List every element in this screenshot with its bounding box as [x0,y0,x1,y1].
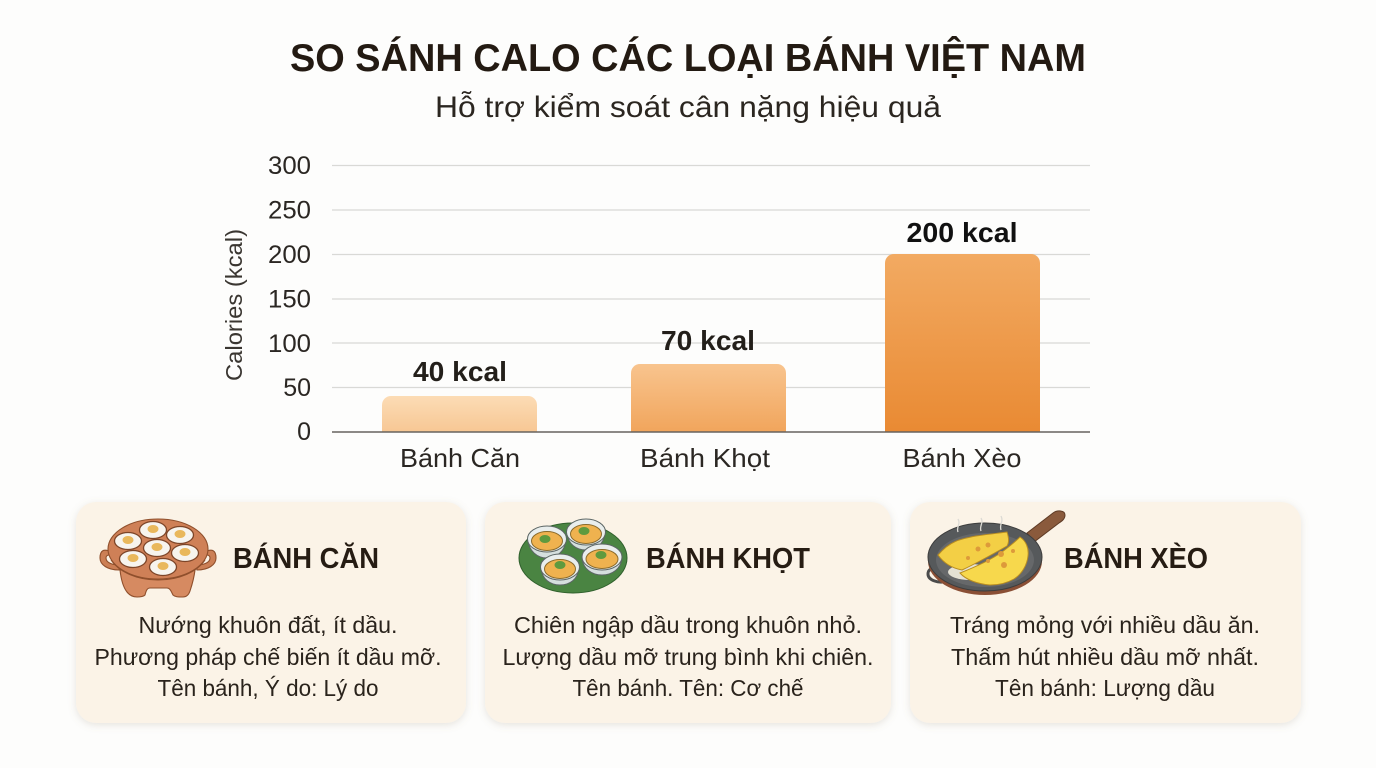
icon: clay mold [100,519,216,597]
y axis labels [268,152,311,446]
card text: Nướng khuôn đất, ít dầu. [138,612,398,638]
panel: Bánh Xèo [910,502,1301,723]
icon: folded crepe [938,532,1008,570]
y axis labels: 250 [268,196,311,224]
card text: Tên bánh. Tên: Cơ chế [572,675,804,701]
y axis labels: 300 [268,152,311,180]
category labels: Bánh Xèo [902,443,1022,473]
category labels: Bánh Khọt [640,443,771,473]
y axis labels: 50 [283,374,311,402]
card text [94,612,442,701]
category labels: Bánh Căn [400,443,520,473]
card text: Tên bánh, Ý do: Lý do [158,675,378,701]
panel: Bánh Căn [76,502,466,723]
category labels [400,443,1022,473]
icon: frying pan [928,511,1065,595]
card heading: BÁNH KHỌT [646,541,810,575]
card heading: BÁNH CĂN [233,541,379,575]
card text: Chiên ngập dầu trong khuôn nhỏ. [514,612,862,638]
y axis labels: 200 [268,241,311,269]
bar: Bánh Xèo [885,254,1040,432]
card heading: BÁNH XÈO [1064,541,1208,575]
y axis labels: 0 [297,418,311,446]
card text: Tên bánh: Lượng dầu [995,675,1215,701]
title: SO SÁNH CALO CÁC LOẠI BÁNH VIỆT NAM [290,36,1086,80]
card text [502,612,874,701]
value labels: 200 kcal [906,217,1018,248]
icon: banana leaf plate [519,523,627,593]
card text: Lượng dầu mỡ trung bình khi chiên. [502,644,874,670]
bar: Bánh Căn [382,396,537,432]
y axis title: Calories (kcal) [221,229,247,381]
value labels: 40 kcal [413,356,507,387]
bar: Bánh Khọt [631,364,786,432]
card text: Tráng mỏng với nhiều dầu ăn. [950,612,1260,638]
y axis labels: 150 [268,286,311,314]
card text: Phương pháp chế biến ít dầu mỡ. [94,644,442,670]
subtitle: Hỗ trợ kiểm soát cân nặng hiệu quả [435,91,941,124]
icon: mold wells [114,522,198,576]
card text: Thấm hút nhiều dầu mỡ nhất. [951,644,1259,670]
y axis labels: 100 [268,330,311,358]
value labels [413,217,1018,387]
card text [950,612,1260,701]
value labels: 70 kcal [661,325,755,356]
bar chart [221,152,1090,473]
panel: Bánh Khọt [485,502,891,723]
icon: bowls [528,519,622,585]
